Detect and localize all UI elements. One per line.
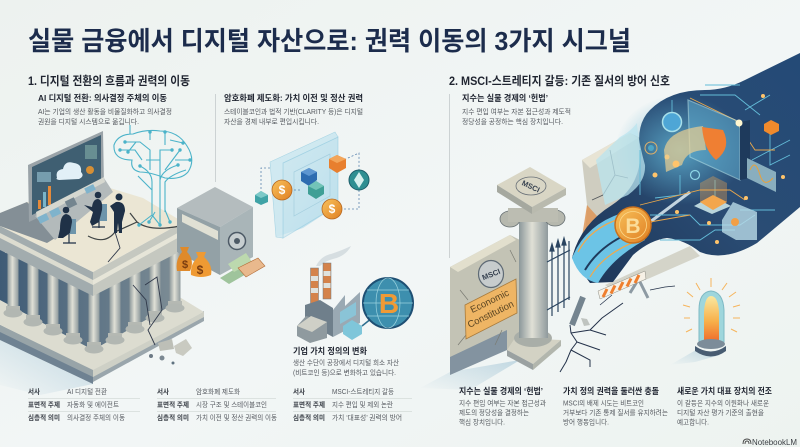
text block: index as constitution: 정당성을 공정하는 핵심 장치입니다. <box>462 117 563 126</box>
text block: index constitution: 제도의 정당성을 결정하는 <box>459 408 530 417</box>
icon: glass box <box>722 202 757 240</box>
icon: money bags: $ <box>197 263 204 277</box>
icon: cubes <box>255 155 346 205</box>
iron fence <box>547 238 570 316</box>
text block: value definition conflict: MSCI의 배제 시도는 비트코인 <box>563 398 644 408</box>
text block: index as constitution <box>462 93 571 126</box>
icon: money bags: $ <box>182 259 188 271</box>
icon: chart card <box>747 158 776 192</box>
pillar: MSCI <box>520 178 541 194</box>
text block: index constitution <box>459 386 547 426</box>
text block: value definition conflict: 거부보다 기존 통제 질서를 유지하려는 <box>563 408 669 417</box>
icon: cash stacks <box>220 253 265 284</box>
table: MSCI narrative <box>293 387 412 422</box>
icon: blue sphere <box>662 112 682 132</box>
text block: value definition conflict: 가치 정의 권력을 둘러싼 충돌 <box>563 386 659 396</box>
table: AI digital narrative: 표면적 주제 <box>28 400 60 409</box>
illustration: ground cracks <box>560 286 675 372</box>
illustration: barricade <box>598 271 648 299</box>
seal: MSCI <box>478 260 504 288</box>
icon: stack cube <box>694 176 731 214</box>
text block: crypto institutionalization: 암호화폐 제도화: 가치 이전 및 정산 권력 <box>224 93 363 103</box>
table: AI digital narrative: 심층적 의미 <box>28 413 60 422</box>
monitor <box>28 131 104 222</box>
text block: new value representation <box>677 386 772 426</box>
glass panel <box>688 100 740 180</box>
heading: section 2: 2. MSCI-스트레티지 갈등: 기존 질서의 방어 신호 <box>449 73 670 88</box>
icon: vault and money <box>177 187 265 284</box>
illustration: stone pillar and constitution wall <box>420 167 570 390</box>
table: crypto narrative <box>157 387 278 422</box>
icon: glass panel with crypto tokens <box>255 132 369 238</box>
text block: new value representation: 새로운 가치 대표 장치의 전조 <box>677 386 772 396</box>
icon: bitcoin coin <box>615 207 651 243</box>
table: AI digital narrative: 서사 <box>28 387 41 396</box>
icon: dollar coin: $ <box>329 202 336 216</box>
table: MSCI narrative: 서사 <box>293 387 306 396</box>
table: MSCI narrative: 심층적 의미 <box>293 413 325 422</box>
illustration: cracked temple with control room <box>0 131 204 395</box>
translucent band <box>664 126 706 172</box>
text block: new value representation: 이 갈등은 지수의 이원화나 새로운 <box>677 398 770 408</box>
text block: corporate value definition: 생산 수단이 공장에서 디지털 희소 자산 <box>293 358 400 367</box>
text block: value definition conflict <box>563 386 669 426</box>
circuit lines <box>640 85 790 240</box>
icon: dollar coin: $ <box>279 183 286 197</box>
table: AI digital narrative: 의사결정 주체의 이동 <box>67 413 126 422</box>
text block: index constitution: 핵심 장치입니다. <box>459 418 505 426</box>
text block: new value representation: 디지털 자산 평가 기준의 출현을 <box>677 408 765 417</box>
table: MSCI narrative: MSCI-스트레티지 갈등 <box>332 387 395 396</box>
cracks <box>88 213 180 240</box>
wall <box>450 235 520 375</box>
text block: AI digital transition: AI 디지털 전환: 의사결정 주체의 이동 <box>38 93 167 103</box>
icon: operators <box>58 192 125 243</box>
icon: factory with bitcoin globe <box>297 246 413 343</box>
plaque: Economic Constitution <box>465 279 517 339</box>
illustration: digital ribbon <box>572 53 800 283</box>
plaque: Economic Constitution: Economic <box>469 288 511 316</box>
table: crypto narrative: 시장 구조 및 스테이블코인 <box>196 400 267 409</box>
text block: corporate value definition: (비트코인 등)으로 변화하고 있습니다. <box>293 368 396 377</box>
heading: section 1: 1. 디지털 전환의 흐름과 권력의 이동 <box>28 73 190 88</box>
table: crypto narrative: 표면적 주제 <box>157 400 189 409</box>
text block: index as constitution: 지수는 실물 경제의 ‘헌법’ <box>462 93 548 103</box>
text block: new value representation: 예고합니다. <box>677 418 709 426</box>
icon: bitcoin coin: B <box>625 215 641 238</box>
plaque: Economic Constitution: Constitution <box>466 299 516 331</box>
table: MSCI narrative: 지수 편입 및 제외 논란 <box>332 400 394 409</box>
text block: AI digital transition: 권원을 디지털 시스템으로 옮깁니다. <box>38 117 139 126</box>
text block: AI digital transition: AI는 기업의 생산 활동을 비물질화하고 의사결정 <box>38 107 172 116</box>
title: 실물 금융에서 디지털 자산으로: 권력 이동의 3가지 시그널 <box>28 26 631 56</box>
icon: ring <box>645 142 657 154</box>
illustration: broken stone wall behind ribbon <box>578 133 700 292</box>
icon: money bags <box>177 247 211 277</box>
text block: crypto institutionalization: 스테이블코인과 법적 기반(CLARITY 등)은 디지털 <box>224 107 363 116</box>
icon: dollar coin <box>272 180 342 219</box>
text block: AI digital transition <box>38 93 172 126</box>
table: crypto narrative: 암호화폐 제도화 <box>196 387 241 396</box>
text block: corporate value definition <box>293 346 400 377</box>
text block: corporate value definition: 기업 가치 정의의 변화 <box>293 346 367 356</box>
text block: index constitution: 지수는 실물 경제의 ‘헌법’ <box>459 386 543 396</box>
table: crypto narrative: 가치 이전 및 정산 권력의 이동 <box>196 413 278 422</box>
glass sheet <box>596 123 645 205</box>
table: AI digital narrative: AI 디지털 전환 <box>67 387 108 396</box>
text block: index constitution: 지수 편입 여부는 자본 접근성과 <box>459 398 547 408</box>
table: MSCI narrative: 가치 ‘대표성’ 권력의 방어 <box>332 413 402 422</box>
table: MSCI narrative: 표면적 주제 <box>293 400 325 409</box>
icon: glowing lamp <box>670 278 740 365</box>
pillar <box>497 167 566 370</box>
icon: circuit brain <box>114 125 192 227</box>
text block: value definition conflict: 방어 행동입니다. <box>563 418 609 426</box>
icon: bitcoin globe: B <box>379 288 399 319</box>
rubble <box>158 339 174 351</box>
table: crypto narrative: 심층적 의미 <box>157 413 189 422</box>
icon: orange cube <box>764 120 779 135</box>
logo: NotebookLM: NotebookLM <box>752 438 797 447</box>
text block: index as constitution: 지수 편입 여부는 자본 접근성과 제도적 <box>462 107 571 116</box>
icon: orange shield <box>702 127 726 160</box>
icon: ethereum token <box>349 170 369 190</box>
text block: crypto institutionalization <box>224 93 363 126</box>
text block: crypto institutionalization: 자산을 경제 내부로 편입시킵니다. <box>224 117 319 126</box>
table: crypto narrative: 서사 <box>157 387 170 396</box>
seal: MSCI: MSCI <box>481 267 502 282</box>
table: AI digital narrative: 자동화 및 에이전트 <box>67 400 120 409</box>
table: AI digital narrative <box>28 387 140 422</box>
